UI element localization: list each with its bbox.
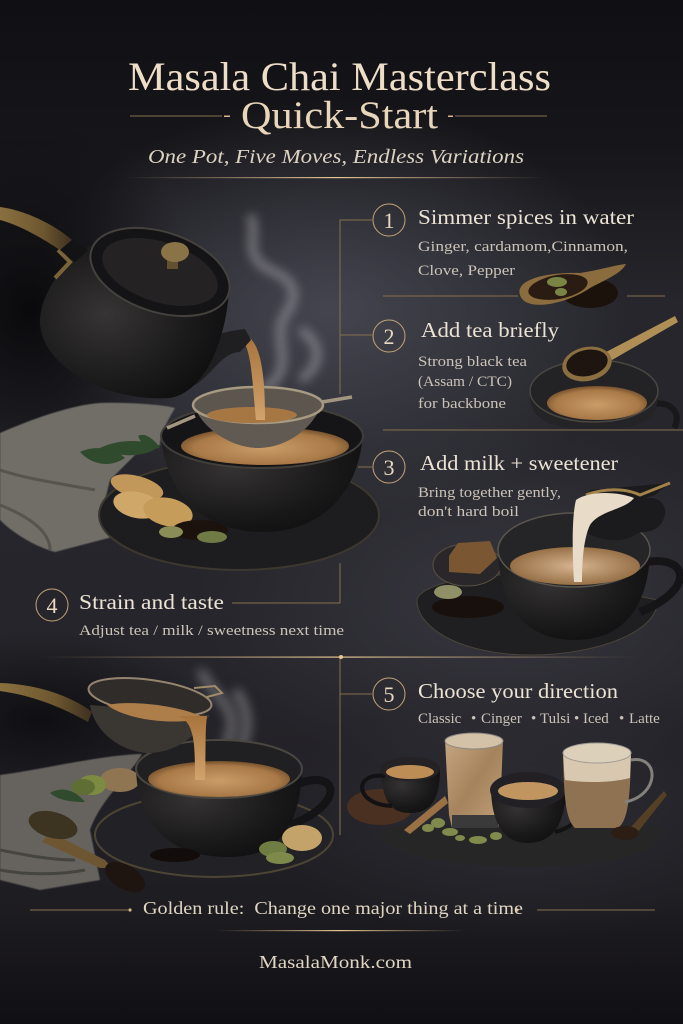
illustration: strainer and cup — [0, 672, 333, 898]
cup with tea — [530, 360, 677, 429]
variations text: Tulsi — [540, 711, 570, 727]
variations text: Cinger — [481, 711, 522, 727]
ginger slices — [108, 469, 166, 505]
towel — [0, 754, 142, 890]
tray — [382, 825, 663, 867]
variations text: • — [574, 711, 579, 727]
cardamom pods — [422, 818, 502, 844]
number 5 — [373, 678, 405, 710]
number 1: 1 — [384, 208, 394, 233]
golden rule — [30, 898, 655, 918]
step 3: don't hard boil — [418, 504, 519, 520]
teapot body — [40, 245, 229, 398]
illustration: teapot pouring into bowl — [0, 207, 379, 570]
strainer — [90, 705, 210, 753]
icon: spoon of spices — [519, 264, 626, 308]
variations text: • — [471, 711, 476, 727]
teapot lid — [79, 212, 241, 332]
step 5 — [347, 678, 667, 867]
heading: Add tea briefly — [421, 318, 560, 342]
strainer — [195, 404, 322, 448]
step 2: (Assam / CTC) — [418, 374, 512, 390]
tray of drinks — [347, 733, 667, 867]
step 2: for backbone — [418, 396, 506, 412]
steam, top — [250, 215, 317, 390]
variations text: Classic — [418, 711, 462, 727]
number 4: 4 — [46, 593, 58, 618]
body: Bring together gently, — [418, 485, 561, 501]
body: Strong black tea — [418, 354, 527, 370]
heading: Simmer spices in water — [418, 205, 634, 229]
title: Masala Chai Masterclass — [128, 54, 551, 99]
plate — [95, 793, 333, 877]
heading: Strain and taste — [79, 590, 224, 614]
cup — [136, 770, 302, 857]
body: Adjust tea / milk / sweetness next time — [79, 623, 344, 639]
icon: tea spoon — [559, 316, 678, 386]
plate, cup, milk, sugar — [417, 483, 680, 655]
variations text: Latte — [629, 711, 660, 727]
number 5: 5 — [384, 682, 394, 707]
variations text: • — [619, 711, 624, 727]
tall iced glass — [445, 733, 503, 828]
number 3 — [373, 451, 405, 483]
number 4 — [36, 589, 68, 621]
step 4 — [36, 589, 344, 639]
website: MasalaMonk.com — [259, 952, 412, 972]
teapot handle — [0, 207, 88, 278]
strainer handle — [0, 683, 92, 722]
pour stream — [243, 338, 265, 420]
step 2 — [373, 316, 678, 429]
teapot knob — [161, 242, 189, 269]
bowl — [161, 435, 363, 532]
step 3 — [373, 451, 680, 655]
cinnamon — [404, 796, 448, 834]
number 1 — [373, 204, 405, 236]
heading: Choose your direction — [418, 679, 619, 703]
step 1 — [373, 204, 634, 308]
ginger slice and cardamom — [282, 825, 322, 851]
classic cup — [362, 757, 440, 813]
golden rule: Golden rule: Change one major thing at a time — [143, 898, 523, 918]
title block — [125, 54, 551, 178]
teapot spout — [177, 329, 251, 388]
number 2: 2 — [384, 324, 394, 349]
leaves — [80, 435, 160, 464]
number 2 — [373, 320, 405, 352]
spices on plate — [172, 520, 228, 540]
ginger, leaves — [50, 768, 140, 802]
variations text: • — [531, 711, 536, 727]
coaster — [347, 789, 413, 825]
steam, lower — [200, 670, 247, 750]
heading: Add milk + sweetener — [420, 451, 618, 475]
number 3: 3 — [384, 455, 394, 480]
latte glass — [563, 743, 652, 828]
spoon — [42, 832, 112, 868]
subtitle heading: Quick-Start — [241, 94, 438, 137]
plate — [99, 460, 379, 570]
body: Ginger, cardamom,Cinnamon, — [418, 239, 628, 255]
middle cup — [490, 772, 579, 843]
towel — [0, 403, 175, 552]
tagline: One Pot, Five Moves, Endless Variations — [148, 146, 524, 168]
variations text: Iced — [583, 711, 609, 727]
connectors — [232, 220, 372, 835]
pour — [178, 716, 207, 780]
small spoon — [630, 791, 667, 833]
step 1: Clove, Pepper — [418, 263, 515, 279]
